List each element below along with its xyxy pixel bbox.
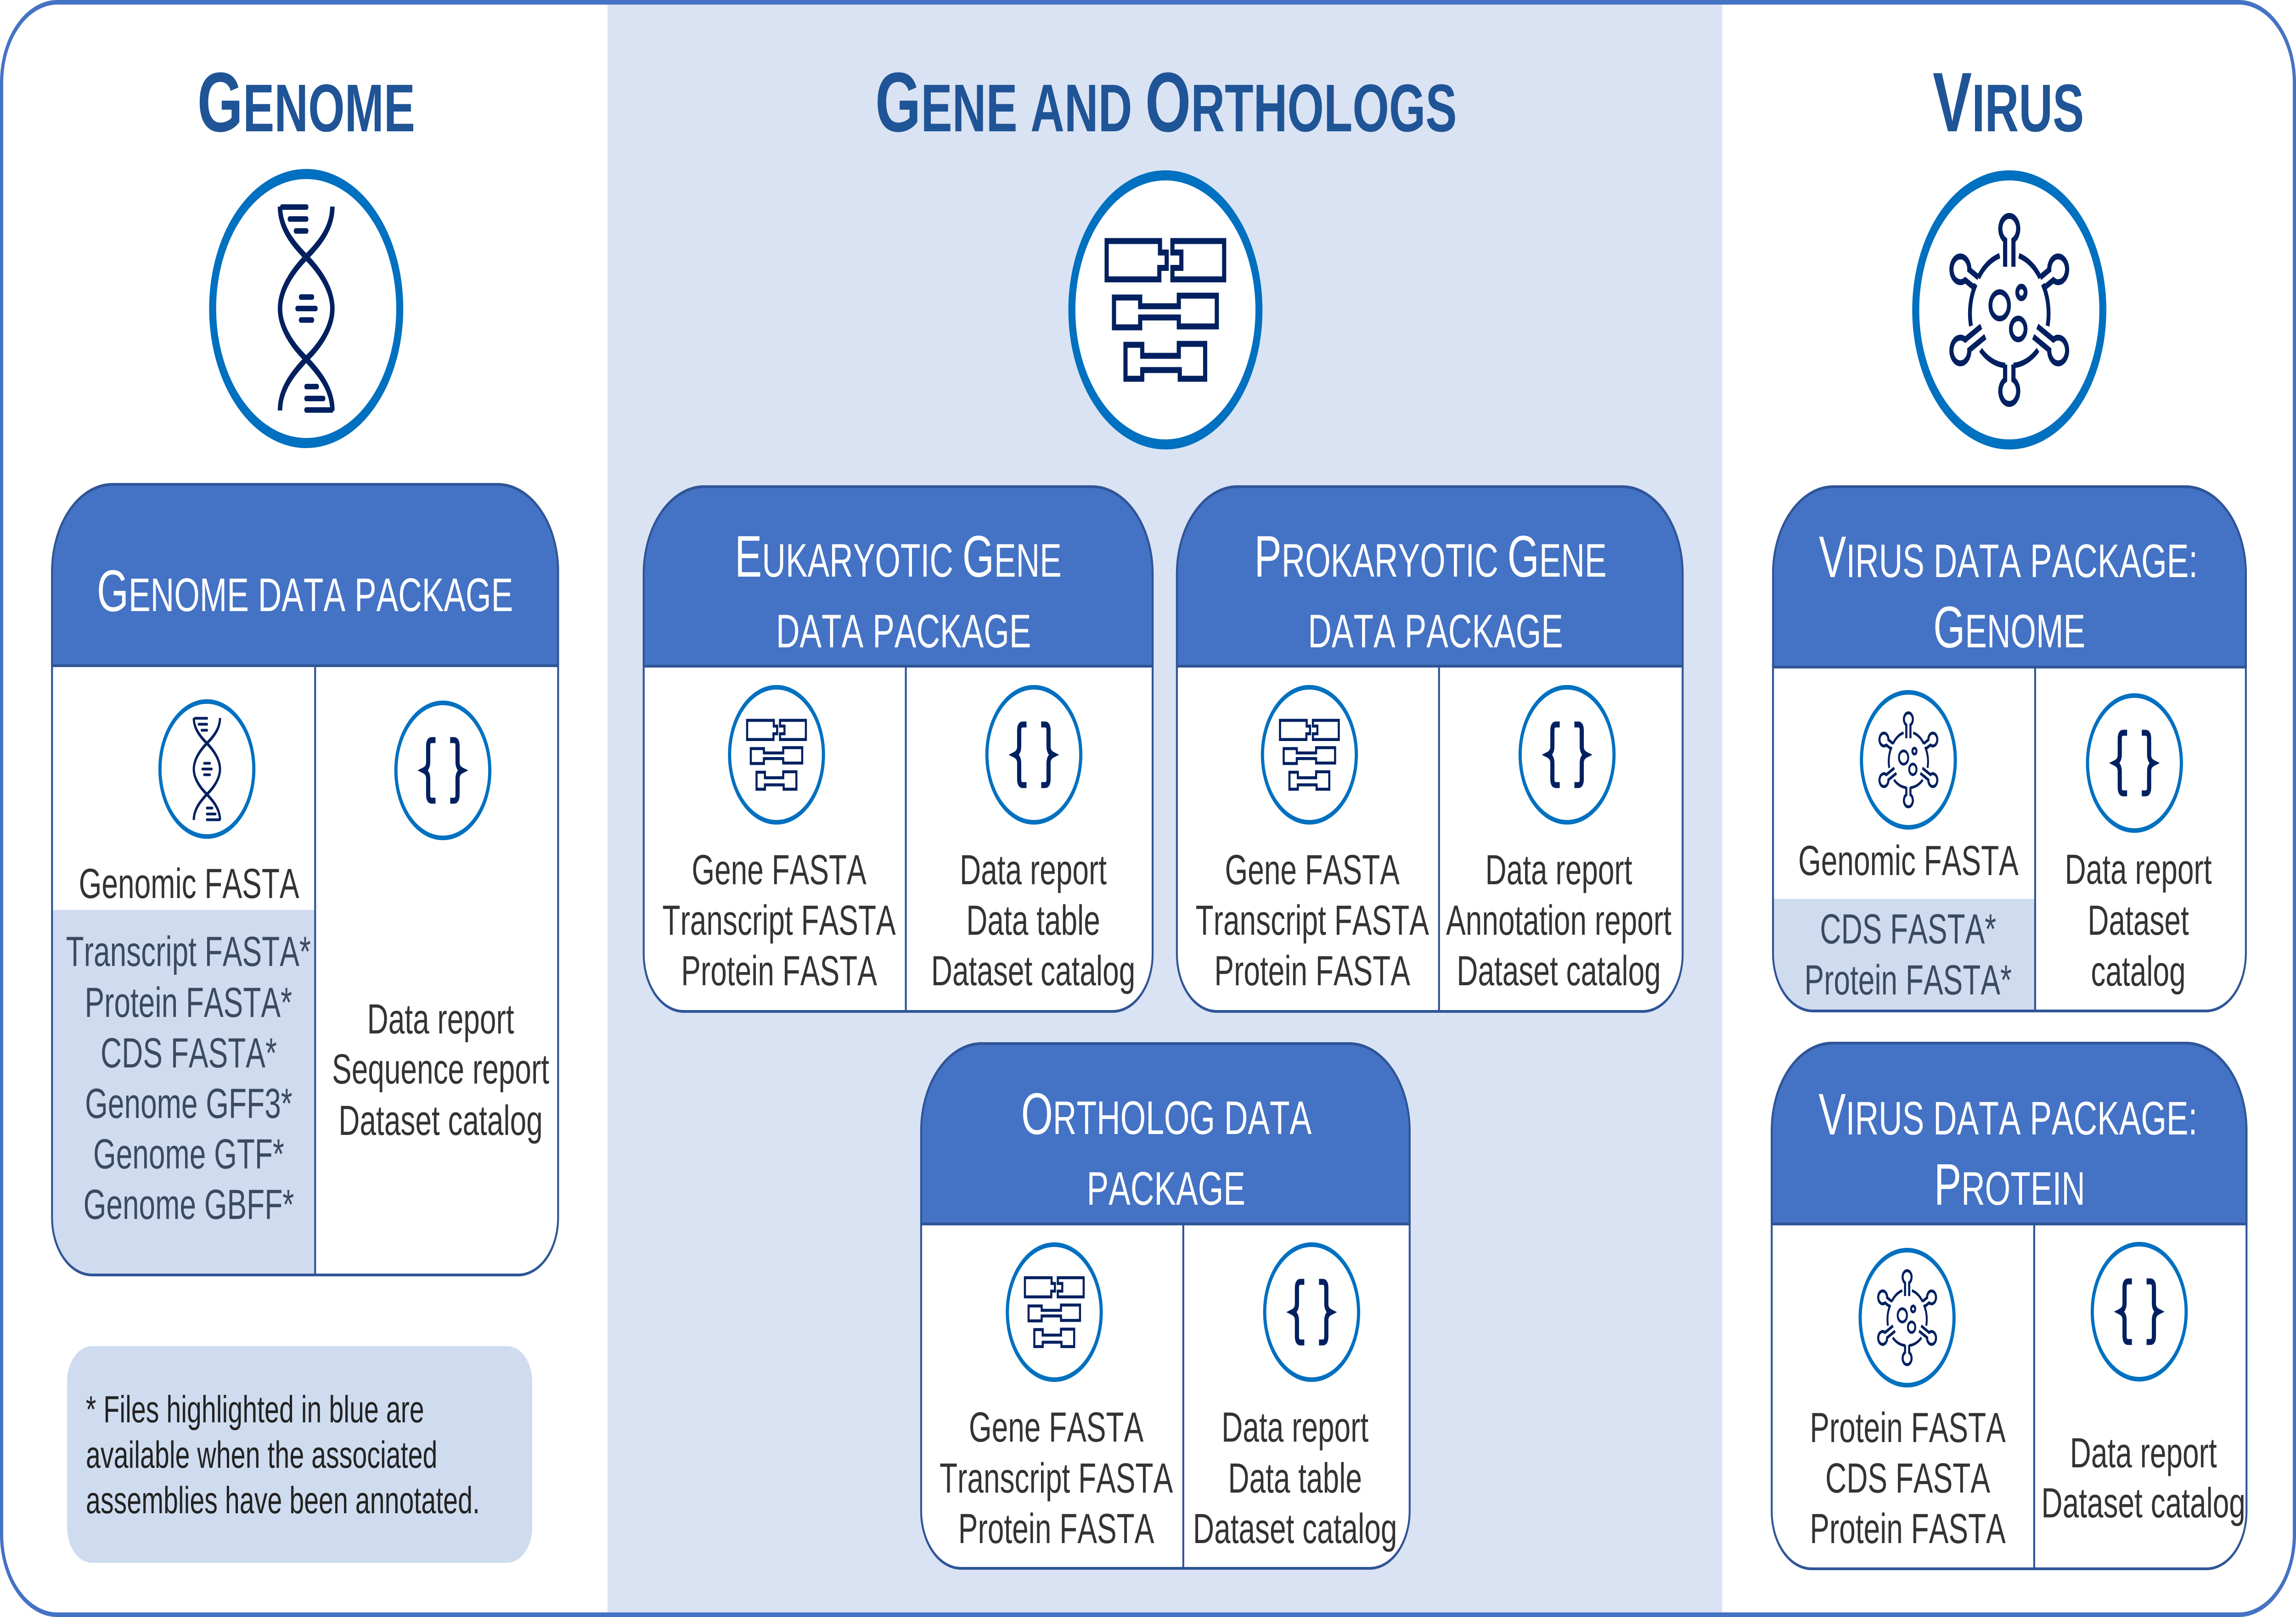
card outline	[52, 484, 558, 1275]
file list: sequence files	[662, 847, 896, 994]
card header	[52, 484, 558, 666]
card title: GENOME DATA PACKAGE	[97, 558, 513, 624]
card title: DATA PACKAGE	[776, 605, 1031, 657]
panel: Virus data package Genome	[1773, 487, 2246, 1011]
file list: annotated files: Genome GTF*	[93, 1131, 284, 1178]
card title: PROTEIN	[1934, 1152, 2085, 1218]
callout: footnote: available when the associated	[86, 1434, 437, 1476]
card title: EUKARYOTIC GENE	[735, 524, 1062, 590]
card header	[644, 487, 1153, 666]
file list: reports: Dataset catalog	[931, 948, 1135, 994]
file list: reports: Annotation report	[1446, 897, 1671, 944]
card title	[1021, 1081, 1312, 1215]
card outline	[1177, 487, 1683, 1011]
panel: Genome data package	[52, 484, 558, 1275]
card header	[1773, 487, 2246, 667]
file list: sequence files: Gene FASTA	[1225, 847, 1400, 893]
file list: annotated files	[66, 928, 311, 1228]
file list: reports: Dataset catalog	[338, 1097, 543, 1144]
file list: sequence files: CDS FASTA	[1825, 1455, 1990, 1502]
file list: annotated files: Protein FASTA*	[1804, 957, 2012, 1004]
file list: annotated files: CDS FASTA*	[101, 1030, 277, 1077]
icon: DNA	[160, 702, 254, 837]
file list: annotated files: Genome GBFF*	[84, 1181, 294, 1228]
file list: reports: Data report	[2065, 846, 2212, 893]
file list: reports: Dataset catalog	[2041, 1480, 2245, 1527]
card title: PROKARYOTIC GENE	[1254, 524, 1607, 590]
card title: VIRUS DATA PACKAGE:	[1819, 524, 2198, 590]
file list: sequence files: Protein FASTA	[958, 1505, 1154, 1552]
icon: virus	[1860, 1250, 1954, 1385]
file list: reports	[2065, 846, 2212, 995]
card outline	[921, 1044, 1410, 1568]
icon: gene	[1262, 687, 1356, 822]
file list: sequence files: Transcript FASTA	[662, 897, 896, 944]
card header	[1772, 1043, 2246, 1224]
icon: braces	[1265, 1245, 1359, 1380]
file list: sequence files: Genomic FASTA	[79, 860, 299, 907]
file list: reports: Data report	[2070, 1430, 2217, 1477]
card title: VIRUS DATA PACKAGE:	[1818, 1082, 2197, 1147]
file list: reports	[1193, 1404, 1397, 1552]
card title: DATA PACKAGE	[1308, 605, 1563, 657]
file list: reports	[332, 996, 549, 1144]
file list: sequence files: Protein FASTA	[681, 948, 877, 994]
icon: large gene	[1072, 175, 1259, 444]
file list: sequence files: Protein FASTA	[1810, 1505, 2006, 1552]
icon: virus	[1862, 692, 1955, 827]
card outline	[1773, 487, 2246, 1011]
callout: footnote: * Files highlighted in blue are	[86, 1388, 424, 1431]
card title	[1818, 1082, 2197, 1218]
panel: gene and orthologs background	[608, 2, 1722, 1615]
card header	[921, 1044, 1410, 1224]
file list: reports: Data report	[960, 847, 1107, 893]
file list: annotated files: Protein FASTA*	[84, 979, 292, 1026]
file list: annotated files: Genome GFF3*	[85, 1080, 293, 1127]
file list: annotated files: CDS FASTA*	[1820, 906, 1996, 953]
file list: reports	[2041, 1430, 2245, 1527]
file list: reports: Dataset	[2088, 897, 2189, 944]
icon: braces	[1520, 687, 1614, 822]
card outline	[644, 487, 1153, 1011]
file list: reports: Data table	[966, 897, 1100, 944]
file list: sequence file: Genomic FASTA	[1798, 837, 2019, 884]
card title: ORTHOLOG DATA	[1021, 1081, 1312, 1147]
panel: Ortholog data package	[921, 1044, 1410, 1568]
icon: braces	[396, 703, 490, 838]
heading: Gene and Orthologs: GENE AND ORTHOLOGS	[875, 55, 1457, 149]
file list: sequence files: Gene FASTA	[969, 1404, 1144, 1451]
icon: braces	[2088, 696, 2181, 831]
file list: reports: Data table	[1228, 1455, 1362, 1502]
heading: Virus: VIRUS	[1933, 55, 2084, 149]
icon: large DNA	[213, 174, 400, 443]
file list: sequence files: Transcript FASTA	[940, 1455, 1173, 1502]
file list: sequence files	[940, 1404, 1173, 1552]
icon: braces	[987, 687, 1081, 822]
file list: reports: Sequence report	[332, 1046, 549, 1093]
panel: Eukaryotic Gene data package	[644, 487, 1153, 1011]
file list: reports: Data report	[1486, 847, 1632, 893]
file list: sequence files	[1810, 1404, 2006, 1552]
file list: reports	[1446, 847, 1671, 994]
file list: sequence files: Transcript FASTA	[1196, 897, 1429, 944]
card header	[1177, 487, 1683, 666]
highlight band	[1773, 899, 2035, 1011]
file list: sequence files: Protein FASTA	[1810, 1404, 2006, 1451]
panel: Virus data package Protein	[1772, 1043, 2246, 1569]
file list: annotated files	[1804, 906, 2012, 1004]
file list: reports: Data report	[367, 996, 514, 1043]
card title	[1819, 524, 2198, 660]
card outline	[1772, 1043, 2246, 1569]
card title: PACKAGE	[1087, 1162, 1245, 1215]
card title	[735, 524, 1062, 657]
file list: reports: Dataset catalog	[1457, 948, 1661, 994]
card title: GENOME	[1933, 595, 2085, 660]
icon: braces	[2092, 1244, 2186, 1379]
file list: reports	[931, 847, 1135, 994]
card title	[1254, 524, 1607, 657]
file list: sequence files: Gene FASTA	[692, 847, 867, 893]
icon: gene	[1007, 1245, 1101, 1380]
icon: large virus	[1916, 175, 2103, 444]
file list: reports: Dataset catalog	[1193, 1505, 1397, 1552]
callout: footnote	[67, 1346, 532, 1563]
heading: Genome: GENOME	[197, 55, 415, 149]
panel: Prokaryotic Gene data package	[1177, 487, 1683, 1011]
icon: gene	[730, 687, 823, 822]
file list: sequence files: Protein FASTA	[1214, 948, 1410, 994]
file list: annotated files: Transcript FASTA*	[66, 928, 311, 975]
file list: sequence files	[1196, 847, 1429, 994]
callout: footnote: assemblies have been annotated.	[86, 1479, 480, 1522]
file list: reports: Data report	[1221, 1404, 1368, 1451]
file list: reports: catalog	[2091, 948, 2186, 995]
highlight band	[52, 910, 315, 1275]
